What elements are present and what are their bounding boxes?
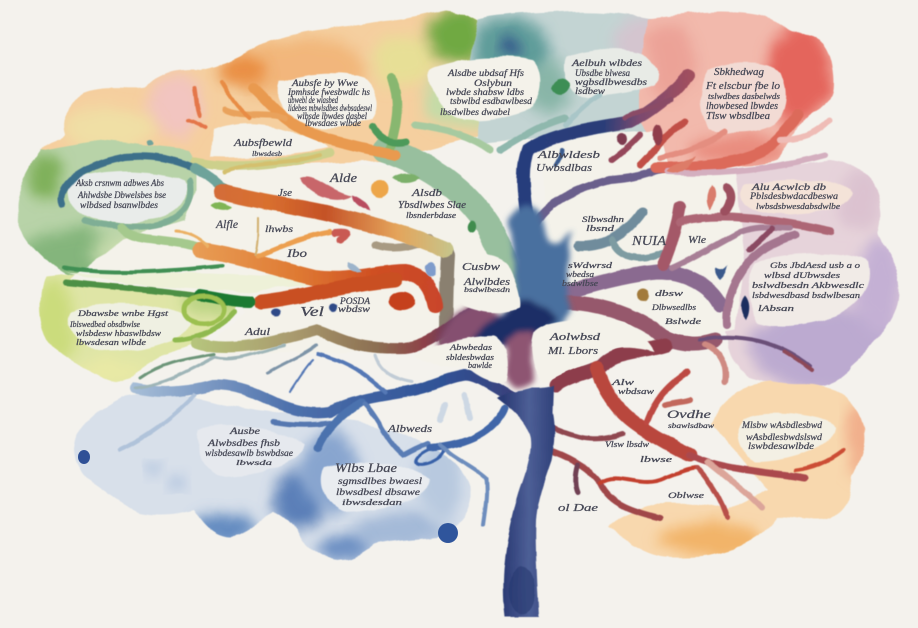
label: short: Wle [688, 235, 707, 246]
label: top centre: Alsdbe ubdsaf Hfs [447, 68, 525, 78]
label: mauve right [749, 182, 841, 211]
label: purple right [752, 261, 865, 313]
label: mid small: lhwbs [265, 224, 294, 234]
label: small red right [610, 378, 655, 396]
bubble: low centre [412, 336, 508, 383]
label: right of centre: Dlbwsedlbs [651, 303, 696, 312]
branches: red crown right [612, 115, 830, 173]
bubble: top right [564, 50, 658, 97]
wash: orange lower right [608, 380, 866, 560]
label: top left: Aubsfe by Wwe [291, 78, 358, 88]
label: branch left: Aubsfbewld [233, 138, 293, 149]
label: red large: sbawlsdbaw [668, 422, 714, 430]
label: big mid: NUIA [631, 234, 666, 249]
label: green left [75, 178, 166, 210]
leaves and drops [210, 79, 749, 320]
label: short branch: Jse [278, 187, 292, 199]
label: red large: Ovdhe [667, 407, 712, 421]
label: top centre: lbsdwlbes dwabel [440, 107, 511, 117]
label: blue dot: wbdsw [338, 304, 370, 314]
label: mauve right: Pblsdesbwdacdbeswa [749, 191, 839, 201]
label: blue left: lbwsda [236, 459, 273, 467]
label: blue left: Ausbe [229, 426, 260, 436]
label: purple right: bslwdbesdn Akbwesdlc [752, 281, 865, 290]
label: top right: Aelbuh wlbdes [571, 58, 643, 68]
bubble: blue left [197, 425, 305, 477]
label: branch left [233, 138, 293, 158]
label: blue right: sgmsdlbes bwaesl [338, 476, 423, 486]
label: lower: Adul [244, 326, 270, 338]
label: top left: lbwsdaes wlbde [305, 118, 361, 128]
label: low centre: bawlde [468, 361, 492, 370]
branch: teal ring around left bubble [61, 140, 230, 250]
label: green left: Ahlwdsbe Dbwelsbes bse [77, 190, 166, 200]
hub: maroon neck [506, 330, 534, 388]
label: small right: Slbwsdhn [582, 215, 624, 224]
label: top left: Ipmhsde fwesbwdlc hs [287, 87, 371, 97]
label: branch left: lbwsdesb [252, 150, 283, 158]
label: bottom: ol Dae [558, 502, 598, 514]
bubble: centre left [455, 253, 520, 313]
label: top centre: tsbwlbd esdbawlbesd [450, 96, 533, 106]
label: mauve right: Alu Acwlcb db [751, 182, 827, 192]
label: centre left bubble [462, 261, 511, 294]
branches: orange upper left [188, 82, 395, 172]
label: top centre: Oslybun [474, 78, 513, 88]
label: orange right: Mlsbw wAsbdlesbwd [741, 420, 823, 430]
label: green left: wlbdsed bsanwlbdes [80, 200, 159, 210]
label: lower small: Ibo [286, 246, 307, 260]
label: lime left: Dbawsbe wnbe Hgst [77, 309, 169, 318]
green trunk limb [372, 78, 600, 340]
wash: orange, pink and peach crown [40, 10, 480, 167]
label: centre green [398, 188, 467, 220]
label: blue centre: Albweds [387, 424, 432, 435]
wash: red crown [638, 10, 834, 168]
label: blue right: ibwsdesdan [342, 498, 402, 507]
label: top right [571, 58, 648, 96]
label: small red lower: Vlsw lbsdw [605, 440, 650, 449]
label: left of centre right [562, 261, 613, 288]
bubble: lime left [68, 304, 190, 352]
label: right of centre: dbsw [655, 289, 684, 298]
centre bubbles [412, 253, 716, 384]
label: red panel: Tlsw wbsdlbea [706, 111, 770, 122]
branches: orange and red middle [64, 192, 472, 348]
branches: blue lower left [120, 345, 510, 525]
bubble: purple right [748, 253, 869, 326]
label: top left: ubwebl de wlasbed [288, 95, 338, 105]
branches: navy upper right [523, 76, 688, 258]
label: red panel: Ft elscbur fbe lo [705, 80, 781, 92]
label: top left [287, 78, 372, 128]
label: navy branch: Albwldesb [537, 149, 601, 161]
bubble: top left [276, 73, 378, 128]
label: low centre: sbldesbwdas [446, 353, 494, 362]
cutout: centre left space [70, 165, 530, 352]
branches: red lower right [553, 345, 843, 518]
stain: navy spot [78, 450, 90, 464]
wash: blue lower left [74, 394, 471, 561]
label: small red right: wbdsaw [618, 387, 655, 396]
bubble: blue right [323, 463, 430, 512]
label: small right: lbsnd [586, 224, 616, 233]
label: centre green: lbsnderbdase [406, 211, 457, 220]
label: top right: wgbsdlbwesdbs [575, 77, 648, 87]
hub: blue upper limb [500, 205, 572, 345]
label: small red lower [605, 440, 705, 500]
label: small right [582, 215, 624, 233]
label: left small: Alfle [215, 217, 239, 231]
label: small red lower: Oblwse [668, 491, 705, 500]
label: mauve right: lwbsdsbwesdabsdwlbe [756, 202, 841, 211]
label: centre left bubble: bsdwlbesdn [464, 286, 511, 294]
cutout: centre right space [536, 130, 745, 345]
label: right of centre: Bslwde [665, 317, 702, 326]
label: lime left: lbwsdesan wlbde [76, 338, 147, 347]
label: orange right: wAsbdlesbwdslswd [746, 432, 823, 442]
label: red panel [705, 67, 781, 122]
label: blue left [205, 426, 293, 467]
label: red panel: tslwdbes dasbelwds [708, 92, 780, 101]
label: lime left: Iblswedbed obsdbwlse [69, 320, 140, 329]
label: purple right: lsbdwesdbasd bsdwlbesan [752, 291, 860, 300]
hub: blended centre of the tree [440, 205, 572, 388]
label: blue left: Alwbsdbes fhsb [207, 438, 281, 448]
cutout: pale green band [66, 272, 310, 292]
label: blue dot: POSDA [339, 296, 371, 306]
label: centre right bubble: Ml. Lbors [547, 346, 598, 357]
label: lime left: wlsbdesw hbaswlbdsw [76, 329, 162, 338]
trunk [497, 385, 555, 617]
label: low centre: Abwbedas [449, 343, 492, 352]
branches: maroon and purple right [548, 188, 830, 382]
label: right of centre [651, 289, 702, 326]
label: orange right [741, 420, 823, 451]
label: left of centre right: wbedsa [566, 270, 594, 279]
label: purple right: Gbs JbdAesd usb a o [770, 261, 860, 270]
panel: handwritten labels [69, 58, 865, 514]
label: orange right: lswbdesawlbde [748, 441, 814, 451]
label: lime left [69, 309, 169, 347]
label: top right: lsdbew [575, 86, 605, 96]
bubble: centre right [532, 320, 655, 384]
label: green left: Aksb crsnwm adbwes Abs [75, 178, 164, 188]
panel: paper cut-outs between branches [66, 50, 869, 512]
label: blue left: wlsbdesawlb bswbdsae [205, 448, 293, 458]
label: left of centre right: bsdwlbse [562, 279, 599, 288]
bubble: red panel [700, 63, 787, 133]
label: blue right [335, 460, 423, 507]
label: centre left bubble: Cusbw [462, 261, 501, 273]
label: vert: Vel [300, 305, 324, 320]
hub: purple and red wash [440, 306, 502, 354]
label: centre left bubble: Alwlbdes [463, 276, 510, 288]
label: purple right: lAbsan [758, 304, 794, 313]
trunk: dark base [509, 566, 535, 614]
label: blue right: lbwsdbesl dbsawe [336, 487, 420, 497]
label: branch centre: Alde [329, 170, 357, 185]
panel: tree [61, 76, 843, 617]
label: purple right: wlbsd dUbwsdes [764, 271, 840, 280]
label: centre right bubble [547, 332, 601, 357]
label: top right: Ubsdbe blwesa [575, 68, 630, 78]
label: red large [667, 407, 714, 430]
label: top left: wlbsde lbwdes dasbel [297, 111, 367, 121]
bubble: top centre [430, 57, 540, 119]
bubble: mauve right [741, 180, 852, 214]
wash: mauve and purple right [725, 160, 900, 386]
label: centre right bubble: Aolwbsd [549, 332, 601, 343]
label: top centre [440, 68, 533, 117]
label: left of centre right: sWdwrsd [568, 261, 613, 270]
label: centre green: Ybsdlwbes Slae [398, 200, 467, 211]
label: small red right: Alw [610, 378, 635, 387]
label: low centre [446, 343, 494, 370]
label: navy branch [536, 149, 601, 174]
hub: navy core [472, 300, 556, 346]
label: red panel: lhowbesed lbwdes [706, 101, 778, 112]
bubble: green left [68, 171, 187, 223]
label: small red lower: lbwse [640, 455, 673, 464]
label: top centre: lwbde shabsw ldbs [446, 87, 525, 97]
bubble: orange right [738, 414, 836, 462]
bubble: branch label [212, 124, 328, 158]
bubble: right-centre label [640, 286, 716, 335]
wash: yellow green lower left [38, 274, 236, 382]
stain: blue drip [438, 523, 458, 543]
label: centre green: Alsdb [411, 188, 442, 199]
label: red panel: Sbkhedwag [714, 67, 764, 78]
label: blue right: Wlbs Lbae [335, 460, 397, 475]
label: navy branch: Uwbsdlbas [536, 162, 592, 174]
wash: teal and blue-grey crown [469, 10, 651, 144]
wash: green left [17, 139, 197, 276]
label: blue dot [338, 296, 371, 314]
label: top left: lidebes mbwlsdbes dwbsadeswl [288, 103, 372, 113]
